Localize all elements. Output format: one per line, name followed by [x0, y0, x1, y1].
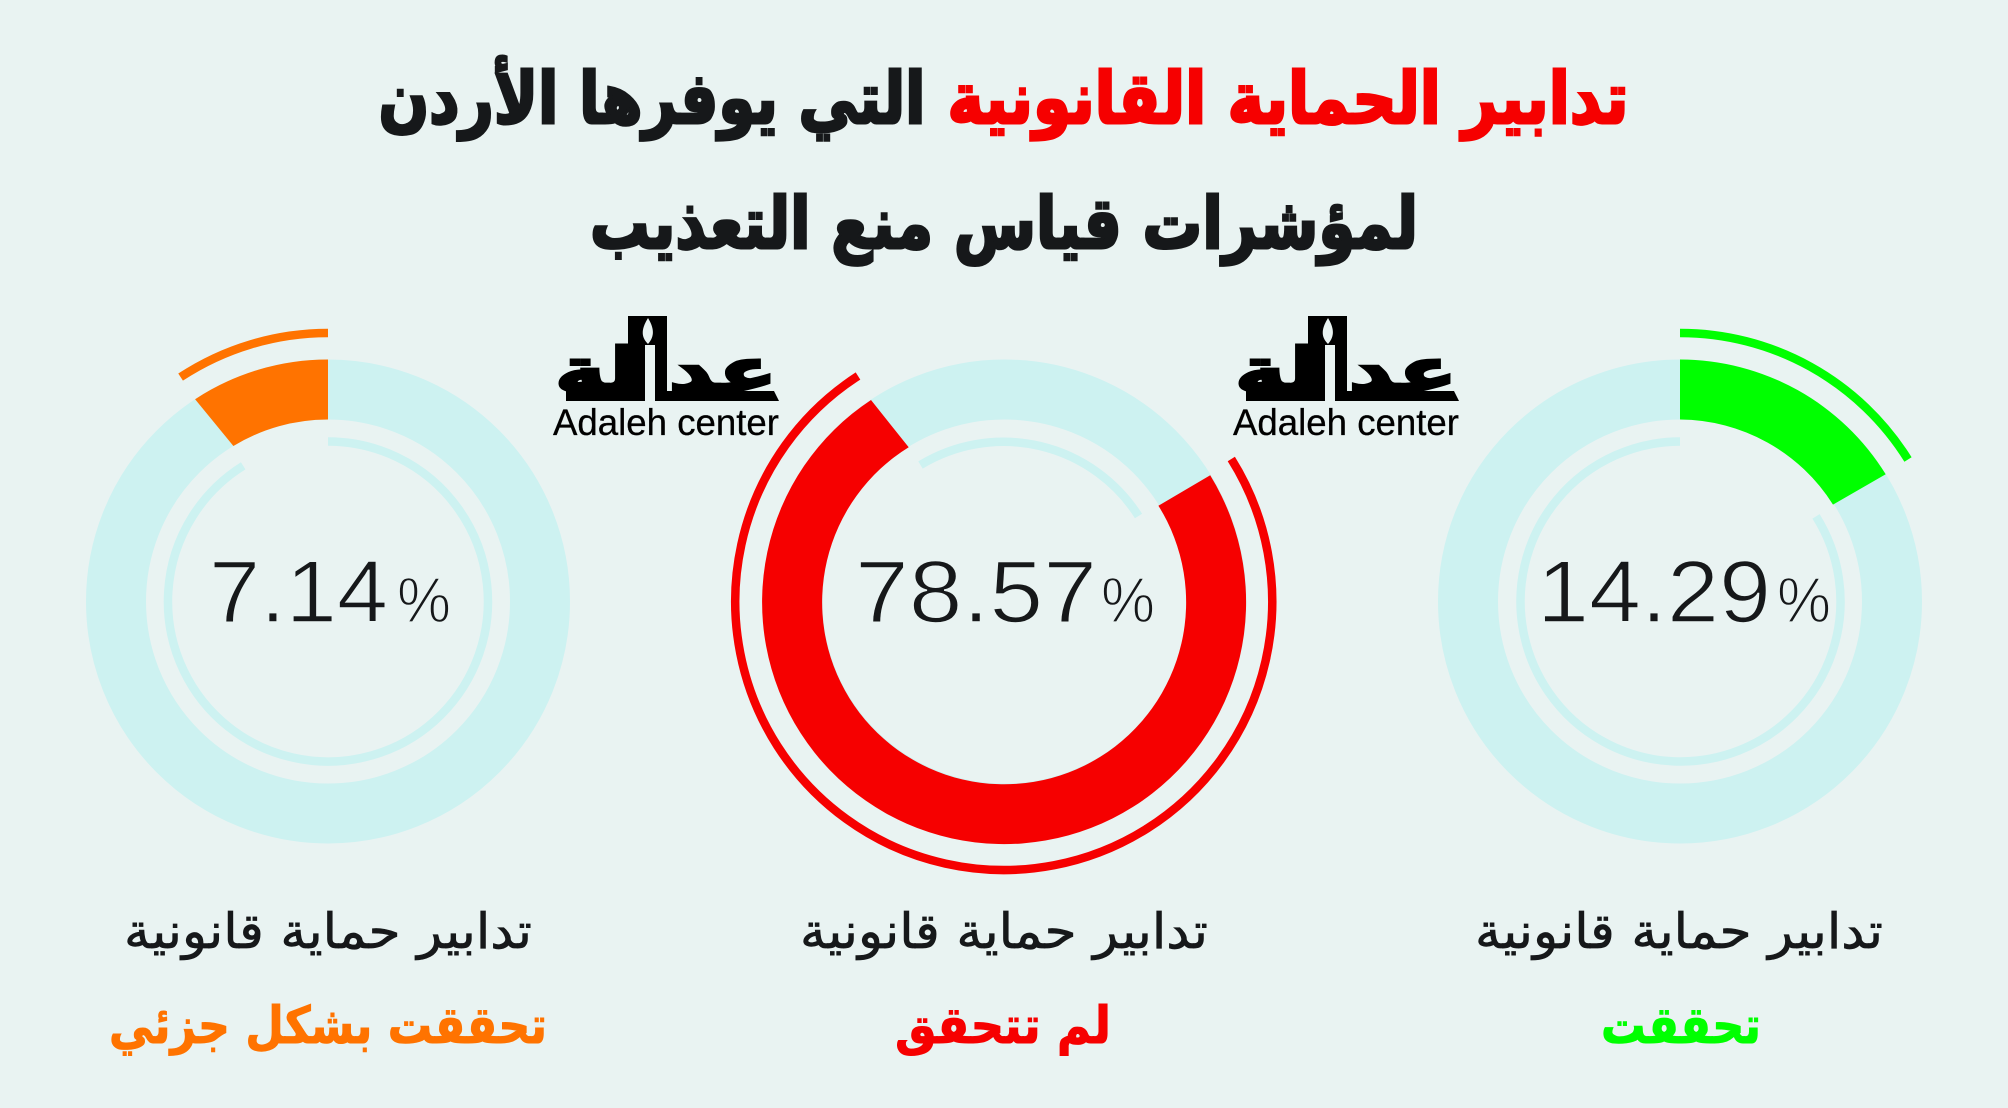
percent sign: % — [1101, 564, 1155, 636]
red segment — [762, 400, 1246, 844]
status: تحققت بشكل جزئي — [109, 997, 547, 1056]
donut: achieved 14.29% — [1468, 333, 1908, 814]
background ring — [1468, 390, 1892, 814]
icon: candle — [628, 316, 667, 401]
donut: partially achieved 7.14% — [116, 333, 540, 814]
logo: Adaleh center right — [1233, 316, 1459, 443]
title line 1 dark part: التي يوفرها الأردن — [378, 56, 926, 141]
value 78.57: 78.57 — [855, 542, 1097, 641]
logo caption: Adaleh center — [1233, 402, 1459, 443]
orange segment — [195, 359, 328, 446]
caption: تدابير حماية قانونية — [1475, 903, 1883, 960]
logo baseline bar — [1246, 391, 1459, 401]
logo caption: Adaleh center — [553, 402, 779, 443]
outer green arc — [1680, 333, 1908, 460]
background ring — [116, 390, 540, 814]
logo baseline bar — [566, 391, 779, 401]
title line 2: لمؤشرات قياس منع التعذيب — [590, 182, 1418, 265]
caption: تدابير حماية قانونية — [124, 903, 532, 960]
title — [378, 56, 1628, 265]
label left: measures partially achieved — [109, 903, 547, 1056]
percent sign: % — [397, 564, 451, 636]
caption: تدابير حماية قانونية — [800, 903, 1208, 960]
outer orange arc — [181, 333, 328, 377]
logo wordmark: عدالة — [1235, 334, 1457, 407]
status: تحققت — [1601, 997, 1761, 1056]
percent sign: % — [1777, 564, 1831, 636]
label right: measures achieved — [1475, 903, 1883, 1056]
title line 1 red part: تدابير الحماية القانونية — [948, 57, 1628, 140]
status: لم تتحقق — [895, 997, 1111, 1056]
value 14.29: 14.29 — [1537, 542, 1771, 641]
inner pale arc — [920, 442, 1138, 516]
icon: candle — [1308, 316, 1347, 401]
logo: Adaleh center left — [553, 316, 779, 443]
background ring — [792, 390, 1216, 814]
logo wordmark: عدالة — [555, 334, 777, 407]
outer red arc — [735, 376, 1272, 870]
inner pale arc — [1521, 442, 1841, 761]
donut: not achieved 78.57% — [735, 376, 1272, 870]
inner pale arc — [168, 442, 488, 762]
value 7.14: 7.14 — [209, 542, 388, 641]
label centre: measures not achieved — [800, 903, 1208, 1056]
green segment — [1680, 360, 1886, 505]
